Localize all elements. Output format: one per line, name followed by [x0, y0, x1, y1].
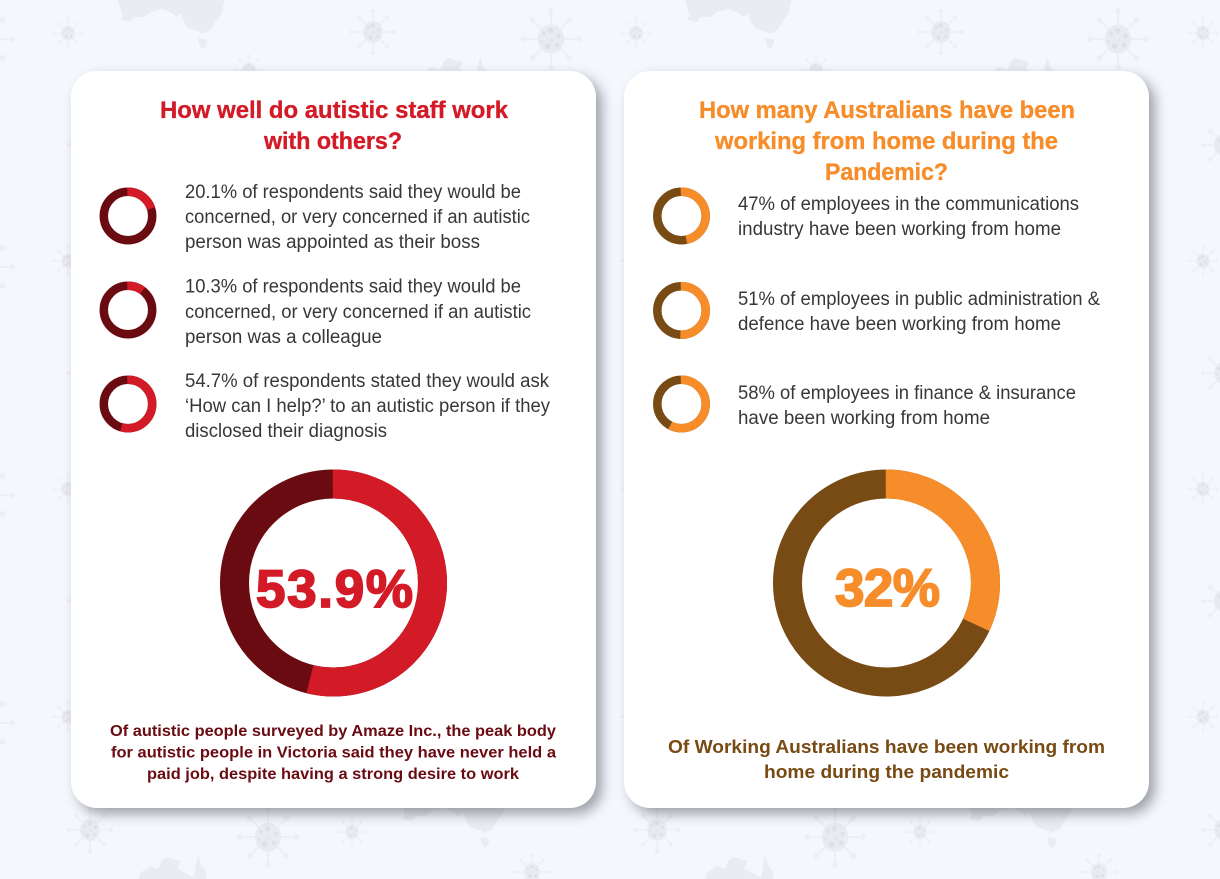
- donut: 58%: [657, 380, 706, 428]
- text: 10.3% colleague: [185, 276, 531, 348]
- chart: 32% donut: [788, 484, 986, 682]
- caption: working Australians: home during the pandemic: [764, 762, 1009, 782]
- text: 47% communications: 47% of employees in the communications: [738, 194, 1079, 215]
- text: 10.3% colleague: person was a colleague: [185, 327, 382, 348]
- text: 58% finance: have been working from home: [738, 408, 990, 429]
- donut: 51%: [657, 286, 706, 335]
- panel: autistic staff: [71, 71, 596, 808]
- panel: working from home: [624, 71, 1149, 808]
- donut: 47%: [657, 192, 706, 240]
- text: 54.7% help: ‘How can I help?’ to an autistic person if they: [185, 396, 550, 417]
- caption: working Australians: Of Working Australians have been working from: [668, 737, 1105, 757]
- heading: autistic staff: How well do autistic staff work: [160, 97, 508, 124]
- heading: autistic staff: [160, 97, 508, 155]
- text: 20.1% boss: person was appointed as their boss: [185, 232, 480, 253]
- text: 58% finance: [738, 383, 1076, 429]
- big number: 32%: 32%: [835, 559, 940, 618]
- text: 20.1% boss: concerned, or very concerned if an autistic: [185, 207, 530, 228]
- text: 54.7% help: disclosed their diagnosis: [185, 421, 387, 442]
- heading: working from home: working from home during the: [714, 128, 1058, 155]
- heading: working from home: [699, 97, 1075, 186]
- donut: 20.1%: [104, 192, 152, 240]
- text: 10.3% colleague: 10.3% of respondents said they would be: [185, 276, 521, 298]
- text: 47% communications: [738, 194, 1079, 240]
- text: 54.7% help: [185, 371, 550, 442]
- text: 20.1% boss: 20.1% of respondents said they would be: [185, 182, 521, 203]
- caption: never held a paid job: [110, 723, 556, 783]
- big number: 53.9%: 53.9%: [256, 560, 413, 619]
- caption: never held a paid job: Of autistic people surveyed by Amaze Inc., the peak body: [110, 723, 556, 740]
- donut: 10.3%: [104, 286, 152, 334]
- caption: never held a paid job: paid job, despite having a strong desire to work: [147, 766, 519, 783]
- caption: never held a paid job: for autistic people in Victoria said they have never held a: [111, 744, 556, 762]
- text: 54.7% help: 54.7% of respondents stated they would ask: [185, 371, 549, 392]
- heading: working from home: How many Australians have been: [699, 97, 1075, 124]
- text: 51% public administration: [738, 289, 1100, 335]
- text: 51% public administration: 51% of employees in public administration &: [738, 289, 1100, 310]
- text: 47% communications: industry have been working from home: [738, 219, 1061, 240]
- text: 10.3% colleague: concerned, or very concerned if an autistic: [185, 302, 531, 323]
- caption: working Australians: [668, 737, 1105, 782]
- donut: 54.7%: [104, 380, 152, 428]
- text: 20.1% boss: [185, 182, 530, 253]
- chart: 53.9% donut: [234, 484, 432, 682]
- text: 51% public administration: defence have been working from home: [738, 314, 1061, 335]
- heading: working from home: Pandemic?: [825, 159, 948, 186]
- heading: autistic staff: with others?: [263, 128, 402, 155]
- text: 58% finance: 58% of employees in finance & insurance: [738, 383, 1076, 404]
